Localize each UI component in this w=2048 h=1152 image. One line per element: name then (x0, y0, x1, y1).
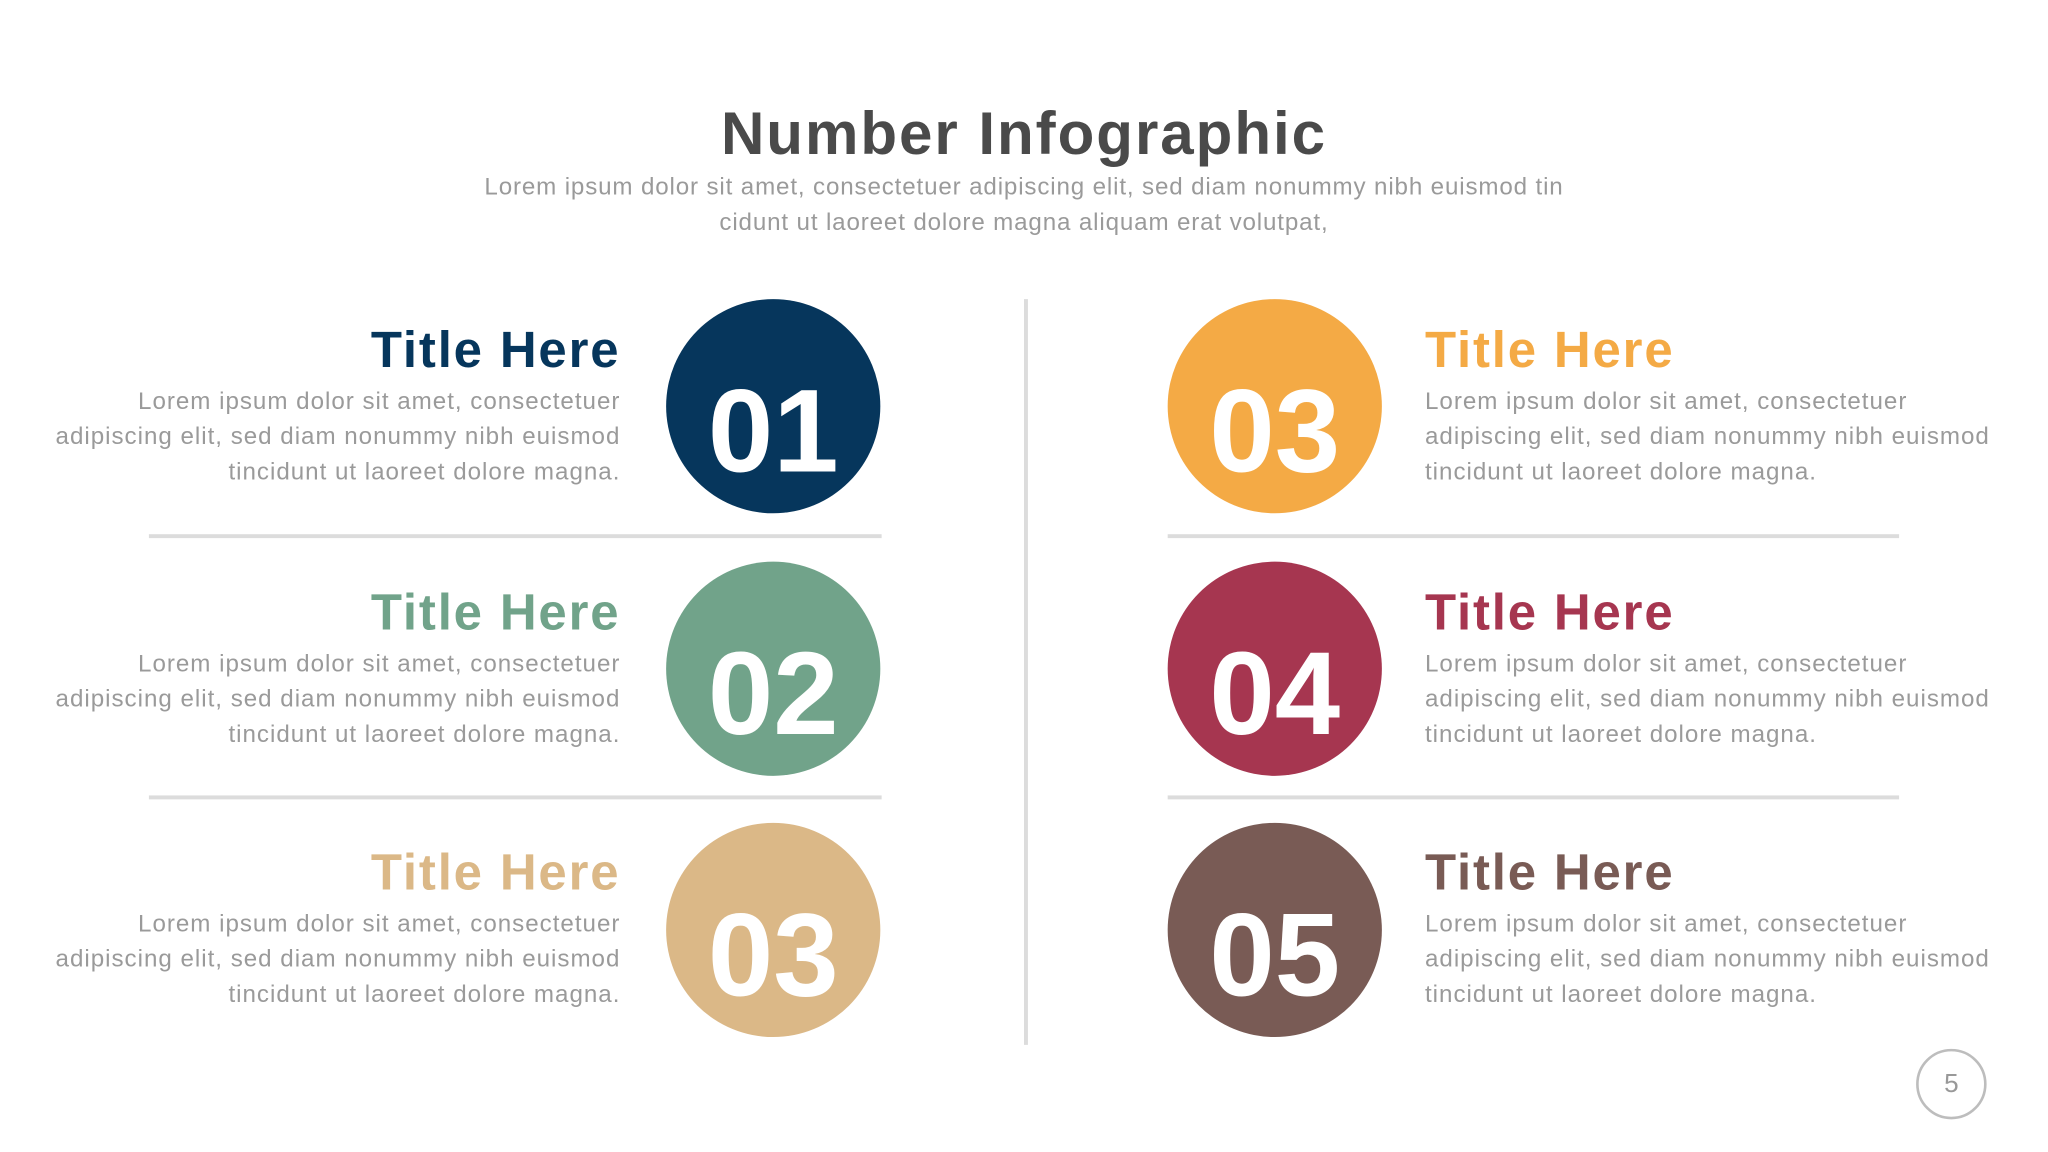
circle 04 (1168, 562, 1382, 776)
text 03 right (1425, 387, 1990, 485)
text 04: Lorem ipsum dolor sit amet, consectetuer (1425, 649, 1907, 677)
subtitle: Lorem ipsum dolor sit amet, consectetuer adipiscing elit, sed diam nonummy nibh euismod tin (484, 172, 1564, 200)
title 04: Title Here (1425, 585, 1674, 641)
circle 03 left: 03 (708, 891, 839, 1021)
text 03 left (56, 909, 620, 1007)
item 04 (1168, 562, 1990, 776)
text 04: adipiscing elit, sed diam nonummy nibh euismod (1425, 684, 1990, 712)
center divider (1024, 299, 1028, 1045)
item 02 (56, 562, 880, 776)
page number: 5 (1944, 1070, 1959, 1098)
circle 02: 02 (708, 630, 839, 760)
text 05: adipiscing elit, sed diam nonummy nibh euismod (1425, 944, 1990, 972)
text 05: tincidunt ut laoreet dolore magna. (1425, 980, 1817, 1007)
subtitle: cidunt ut laoreet dolore magna aliquam erat volutpat, (719, 208, 1329, 235)
text 02: Lorem ipsum dolor sit amet, consectetuer (138, 649, 620, 677)
title 05: Title Here (1425, 845, 1674, 901)
title 01: Title Here (371, 323, 620, 379)
text 02: adipiscing elit, sed diam nonummy nibh euismod (56, 684, 620, 712)
text 01: Lorem ipsum dolor sit amet, consectetuer (138, 387, 620, 414)
circle 04: 04 (1209, 630, 1340, 760)
circle 03 right: 03 (1209, 367, 1340, 498)
title 02: Title Here (371, 585, 620, 641)
item 01 (56, 299, 880, 514)
item 05 (1168, 822, 1990, 1037)
title 03 left: Title Here (371, 845, 620, 901)
text 05: Lorem ipsum dolor sit amet, consectetuer (1425, 909, 1907, 936)
text 05 (1425, 909, 1990, 1007)
text 03 right: Lorem ipsum dolor sit amet, consectetuer (1425, 387, 1907, 414)
circle 03 left (666, 823, 880, 1037)
item 03 left (56, 822, 880, 1037)
text 01: adipiscing elit, sed diam nonummy nibh euismod (56, 422, 620, 449)
text 03 left: adipiscing elit, sed diam nonummy nibh euismod (56, 944, 620, 972)
circle 01 (666, 299, 880, 513)
subtitle (484, 172, 1564, 235)
text 03 left: tincidunt ut laoreet dolore magna. (228, 980, 620, 1007)
text 01 (56, 387, 620, 485)
title 03 right: Title Here (1425, 323, 1674, 379)
text 03 right: tincidunt ut laoreet dolore magna. (1425, 457, 1817, 485)
circle 05 (1168, 823, 1382, 1037)
circle 02 (666, 562, 880, 776)
circle 01: 01 (708, 367, 839, 498)
text 04 (1425, 649, 1990, 747)
title: Number Infographic (721, 99, 1327, 167)
text 03 right: adipiscing elit, sed diam nonummy nibh euismod (1425, 422, 1990, 449)
text 03 left: Lorem ipsum dolor sit amet, consectetuer (138, 909, 620, 936)
text 01: tincidunt ut laoreet dolore magna. (228, 457, 620, 485)
item 03 right (1168, 299, 1990, 514)
page number (1916, 1049, 1987, 1119)
circle 03 right (1168, 299, 1382, 513)
text 04: tincidunt ut laoreet dolore magna. (1425, 720, 1817, 747)
text 02 (56, 649, 620, 747)
text 02: tincidunt ut laoreet dolore magna. (228, 720, 620, 747)
circle 05: 05 (1209, 891, 1340, 1021)
